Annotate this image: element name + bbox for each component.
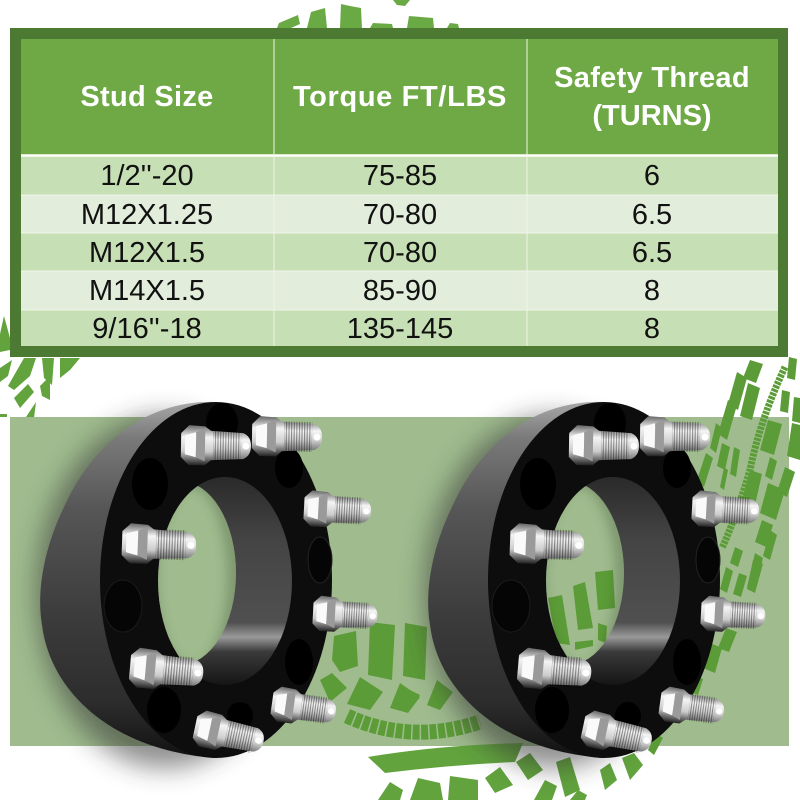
header: safety thread: (TURNS) bbox=[592, 100, 712, 132]
row 4: M14X1.5 bbox=[89, 275, 205, 307]
header: stud size: Stud Size bbox=[80, 81, 214, 113]
row 1 bbox=[100, 160, 660, 192]
row 3 bbox=[89, 237, 672, 269]
row 5: 135-145 bbox=[347, 313, 453, 345]
wheel spacer right bbox=[425, 402, 766, 768]
row backgrounds bbox=[21, 155, 778, 346]
tread: top fragments bbox=[277, 0, 459, 28]
header: safety thread bbox=[554, 62, 750, 132]
tread: bottom track bbox=[368, 743, 643, 800]
row 4 bbox=[89, 275, 660, 307]
row 3: M12X1.5 bbox=[89, 237, 205, 269]
row 5: 8 bbox=[644, 313, 660, 345]
tread: panel middle track bbox=[320, 570, 615, 732]
table border bbox=[10, 28, 788, 357]
header: safety thread: Safety Thread bbox=[554, 62, 750, 94]
row 3: 6.5 bbox=[632, 237, 672, 269]
header: torque: Torque FT/LBS bbox=[293, 81, 507, 113]
table bbox=[10, 28, 788, 357]
row 3: 70-80 bbox=[363, 237, 437, 269]
green background panel bbox=[10, 417, 789, 746]
wheel spacer left bbox=[37, 402, 378, 768]
row 4: 85-90 bbox=[363, 275, 437, 307]
row 2: M12X1.25 bbox=[81, 199, 213, 231]
row 1: 75-85 bbox=[363, 160, 437, 192]
row 5 bbox=[92, 313, 660, 345]
row 2: 70-80 bbox=[363, 199, 437, 231]
row 1: 6 bbox=[644, 160, 660, 192]
tread: left fragments bbox=[0, 316, 80, 420]
row 4: 8 bbox=[644, 275, 660, 307]
row 2: 6.5 bbox=[632, 199, 672, 231]
tread: right track bbox=[648, 357, 800, 755]
header background bbox=[21, 39, 778, 155]
row 5: 9/16''-18 bbox=[92, 313, 202, 345]
row 2 bbox=[81, 199, 672, 231]
row 1: 1/2''-20 bbox=[100, 160, 194, 192]
